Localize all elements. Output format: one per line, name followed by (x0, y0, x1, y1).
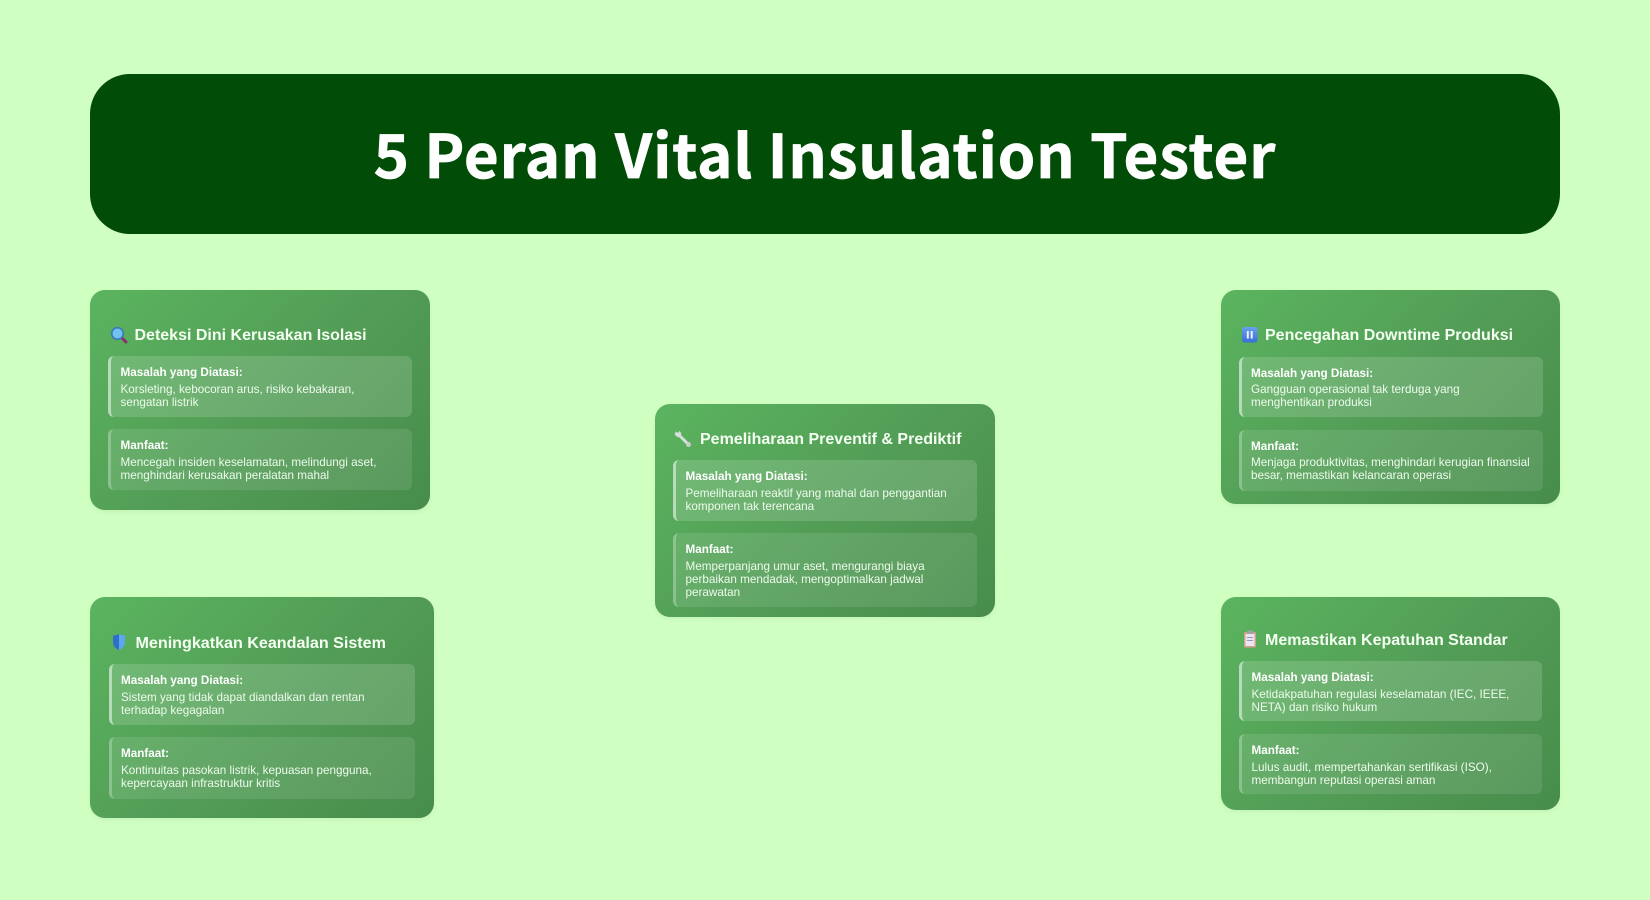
problem box: Ketidakpatuhan regulasi keselamatan (IEC, IEEE, (1252, 688, 1509, 700)
problem box: Masalah yang Diatasi: (1252, 671, 1374, 684)
title banner (90, 74, 1560, 234)
heading: Pemeliharaan Preventif & Prediktif (700, 431, 961, 448)
problem box (108, 356, 412, 417)
problem box (108, 664, 415, 725)
panel: Memastikan Kepatuhan Standar (1220, 597, 1560, 810)
problem box (673, 460, 977, 521)
heading: Meningkatkan Keandalan Sistem (136, 634, 386, 652)
problem box: sengatan listrik (120, 396, 198, 409)
problem box: komponen tak terencana (686, 500, 814, 513)
benefit box: Menjaga produktivitas, menghindari kerugian finansial (1251, 456, 1530, 469)
benefit box (108, 429, 412, 490)
problem box: Masalah yang Diatasi: (120, 366, 243, 379)
icon: pause button (1242, 327, 1258, 342)
panel: Meningkatkan Keandalan Sistem (90, 597, 434, 818)
panel: Deteksi Dini Kerusakan Isolasi (90, 290, 430, 510)
problem box: Korsleting, kebocoran arus, risiko kebakaran, (120, 382, 354, 396)
benefit box (1239, 734, 1542, 794)
benefit box (108, 737, 415, 799)
benefit box: membangun reputasi operasi aman (1252, 774, 1435, 787)
problem box: Pemeliharaan reaktif yang mahal dan penggantian (686, 486, 947, 500)
icon: clipboard (1244, 630, 1256, 648)
problem box: Sistem yang tidak dapat diandalkan dan rentan (121, 690, 365, 704)
heading: Deteksi Dini Kerusakan Isolasi (134, 327, 367, 344)
benefit box: Mencegah insiden keselamatan, melindungi aset, (120, 456, 376, 468)
heading: Memastikan Kepatuhan Standar (1265, 632, 1508, 649)
problem box: NETA) dan risiko hukum (1252, 701, 1377, 714)
benefit box: perawatan (686, 586, 740, 599)
benefit box: menghindari kerusakan peralatan mahal (120, 469, 329, 482)
problem box: terhadap kegagalan (121, 704, 224, 717)
title banner: 5 Peran Vital Insulation Tester (374, 109, 1276, 196)
benefit box: Memperpanjang umur aset, mengurangi biaya (686, 560, 925, 572)
benefit box: Kontinuitas pasokan listrik, kepuasan pengguna, (121, 764, 372, 776)
benefit box: Manfaat: (1252, 744, 1300, 757)
heading: Pencegahan Downtime Produksi (1265, 327, 1513, 344)
benefit box: perbaikan mendadak, mengoptimalkan jadwal (686, 573, 923, 586)
benefit box: Manfaat: (686, 543, 734, 556)
benefit box: kepercayaan infrastruktur kritis (121, 777, 280, 790)
problem box: Masalah yang Diatasi: (121, 674, 243, 687)
benefit box (1238, 430, 1543, 490)
problem box: Gangguan operasional tak terduga yang (1251, 383, 1460, 396)
icon: magnifying glass (110, 326, 128, 344)
benefit box (673, 533, 977, 607)
benefit box: Lulus audit, mempertahankan sertifikasi (ISO), (1252, 760, 1492, 774)
problem box: Masalah yang Diatasi: (1251, 366, 1373, 380)
icon: wrench (674, 430, 691, 447)
benefit box: Manfaat: (121, 747, 169, 760)
panel: Pemeliharaan Preventif & Prediktif (655, 404, 995, 617)
benefit box: besar, memastikan kelancaran operasi (1251, 469, 1451, 482)
problem box (1239, 661, 1542, 721)
panel: Pencegahan Downtime Produksi (1220, 290, 1560, 504)
problem box: Masalah yang Diatasi: (686, 470, 808, 483)
problem box: menghentikan produksi (1251, 396, 1372, 409)
benefit box: Manfaat: (120, 439, 169, 452)
benefit box: Manfaat: (1251, 440, 1299, 452)
icon: shield (113, 634, 125, 650)
problem box (1238, 356, 1543, 417)
